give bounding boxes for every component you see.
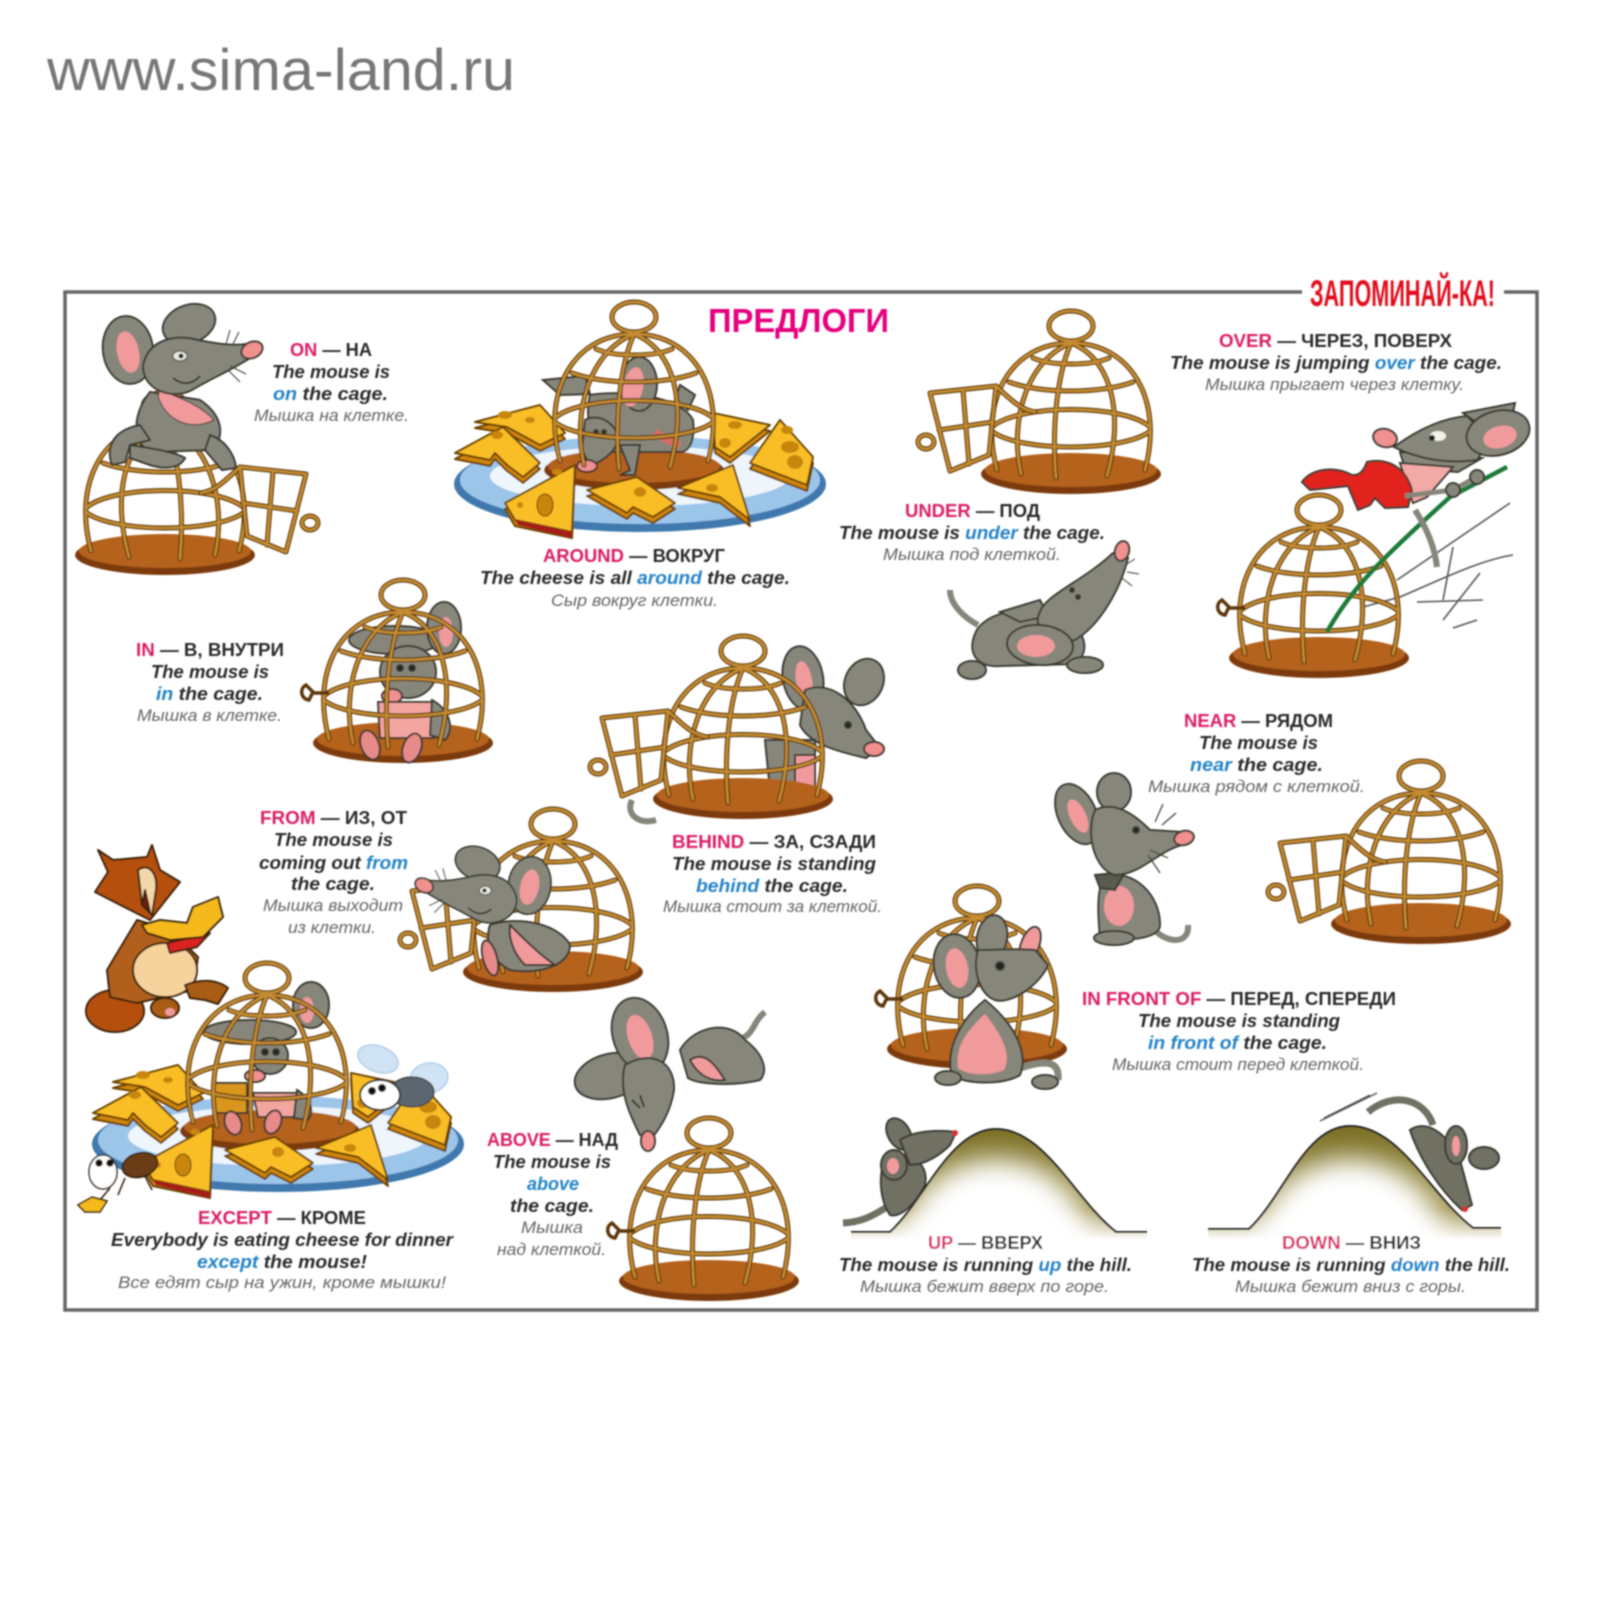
text: in front of: in front of the cage. xyxy=(1148,1033,1327,1053)
cage with door xyxy=(400,809,643,992)
text: above: над клеткой. xyxy=(497,1240,606,1259)
cage xyxy=(1218,495,1409,678)
hill xyxy=(1207,1124,1502,1264)
cage xyxy=(608,1118,799,1301)
text: under xyxy=(839,501,1105,564)
text: behind: BEHIND — ЗА, СЗАДИ xyxy=(672,832,876,852)
panel: around xyxy=(454,302,826,610)
front cheese xyxy=(143,1125,388,1198)
text: in: The mouse is xyxy=(151,662,269,682)
text: down: The mouse is running down the hill. xyxy=(1192,1255,1510,1275)
mouse in cage xyxy=(349,602,461,765)
cage with door xyxy=(590,636,833,819)
tail xyxy=(630,800,656,821)
cage xyxy=(555,302,713,469)
jumping mouse xyxy=(1302,403,1535,567)
mouse running down xyxy=(1368,1100,1499,1212)
text: over: Мышка прыгает через клетку. xyxy=(1205,375,1464,394)
panel: near xyxy=(1046,711,1511,945)
cage with door xyxy=(1268,761,1511,944)
text: up: UP — ВВЕРХ xyxy=(928,1233,1043,1253)
cage xyxy=(302,580,482,747)
text: under: Мышка под клеткой. xyxy=(883,545,1061,564)
text: over xyxy=(1170,331,1502,394)
panel: under xyxy=(839,311,1161,679)
site url: www.sima-land.ru xyxy=(46,38,515,103)
text: up xyxy=(839,1233,1132,1296)
text: above: The mouse is xyxy=(493,1152,611,1172)
mouse inside cage xyxy=(543,357,695,475)
text: in front of: The mouse is standing xyxy=(1138,1011,1340,1031)
cage xyxy=(876,886,1067,1069)
text: under: The mouse is under the cage. xyxy=(839,523,1105,543)
text: behind xyxy=(663,832,882,916)
text: under: UNDER — ПОД xyxy=(905,501,1040,521)
text: from xyxy=(259,808,408,937)
motion lines xyxy=(1363,503,1513,628)
text: around: AROUND — ВОКРУГ xyxy=(543,546,725,566)
motion lines xyxy=(1320,1093,1377,1121)
cage with door xyxy=(75,392,318,575)
text: from: Мышка выходит xyxy=(263,896,403,915)
text: near: Мышка рядом с клеткой. xyxy=(1148,777,1365,796)
mouse near xyxy=(1046,773,1195,945)
mouse in cage xyxy=(204,982,329,1137)
text: except: EXCEPT — КРОМЕ xyxy=(198,1208,366,1228)
mouse behind xyxy=(765,643,891,790)
text: on xyxy=(254,340,409,425)
text: except: Все едят сыр на ужин, кроме мышки! xyxy=(118,1273,446,1292)
text: on: Мышка на клетке. xyxy=(254,406,409,425)
text: from: FROM — ИЗ, ОТ xyxy=(260,808,407,828)
text: except: except the mouse! xyxy=(197,1252,367,1272)
pole xyxy=(1327,467,1507,632)
text: down: Мышка бежит вниз с горы. xyxy=(1235,1277,1466,1296)
text: near: near the cage. xyxy=(1190,755,1323,775)
text: behind: Мышка стоит за клеткой. xyxy=(663,897,882,916)
text: except xyxy=(111,1208,454,1292)
text: near xyxy=(1148,711,1365,796)
text: around: The cheese is all around the cage. xyxy=(480,568,790,588)
cage xyxy=(188,963,346,1130)
panel: in front of xyxy=(876,886,1396,1089)
panel: in xyxy=(136,580,493,765)
panel: over xyxy=(1170,331,1535,678)
text: up: The mouse is running up the hill. xyxy=(839,1255,1132,1275)
mouse in front xyxy=(929,913,1058,1089)
beetle and ant xyxy=(78,1149,160,1212)
text: on: The mouse is xyxy=(272,362,390,382)
text: above: Мышка xyxy=(521,1218,583,1237)
text: above xyxy=(487,1130,618,1259)
cage with door xyxy=(918,311,1161,494)
cage base xyxy=(544,449,724,490)
panel: from xyxy=(259,808,643,992)
text: in xyxy=(136,640,284,725)
frame xyxy=(65,292,1537,1310)
text: above: above xyxy=(527,1174,579,1194)
text: around xyxy=(480,546,790,610)
text: in: IN — В, ВНУТРИ xyxy=(136,640,284,660)
fly xyxy=(354,1040,450,1110)
hill xyxy=(850,1126,1148,1264)
text: up: Мышка бежит вверх по горе. xyxy=(860,1277,1109,1296)
panel: on xyxy=(75,297,409,575)
title: ПРЕДЛОГИ xyxy=(708,302,889,339)
text: on: ON — НА xyxy=(290,340,372,360)
front cheese xyxy=(505,465,750,538)
plate and back cheese xyxy=(454,405,826,532)
text: from: из клетки. xyxy=(288,918,376,937)
panel: behind xyxy=(590,636,891,916)
text: except: Everybody is eating cheese for dinner xyxy=(111,1230,454,1250)
cage base xyxy=(180,1110,360,1151)
text: from: coming out from xyxy=(259,853,408,873)
panel: except xyxy=(78,845,464,1292)
text: near: NEAR — РЯДОМ xyxy=(1184,711,1333,731)
text: from: The mouse is xyxy=(274,830,393,850)
text: over: OVER — ЧЕРЕЗ, ПОВЕРХ xyxy=(1219,331,1452,351)
text: down: DOWN — ВНИЗ xyxy=(1282,1233,1421,1253)
text: in front of xyxy=(1082,989,1396,1074)
text: behind: The mouse is standing xyxy=(672,854,876,874)
mouse on top xyxy=(99,297,265,470)
text: from: the cage. xyxy=(291,874,375,894)
mouse coming out xyxy=(413,840,570,977)
plate and back cheese xyxy=(92,1065,464,1192)
mouse running up xyxy=(843,1114,958,1223)
mouse above xyxy=(570,991,765,1151)
text: behind: behind the cage. xyxy=(696,876,848,896)
text: in front of: IN FRONT OF — ПЕРЕД, СПЕРЕДИ xyxy=(1082,989,1396,1009)
text: above: ABOVE — НАД xyxy=(487,1130,618,1150)
cat with cheese xyxy=(86,845,228,1032)
text: above: the cage. xyxy=(510,1196,594,1216)
text: near: The mouse is xyxy=(1199,733,1318,753)
text: in front of: Мышка стоит перед клеткой. xyxy=(1112,1055,1364,1074)
text: in: in the cage. xyxy=(156,684,263,704)
text: down xyxy=(1192,1233,1510,1296)
cage base xyxy=(313,722,493,763)
text: over: The mouse is jumping over the cage. xyxy=(1170,353,1502,373)
text: on: on the cage. xyxy=(273,384,388,404)
panel: down xyxy=(1192,1092,1510,1296)
text: in: Мышка в клетке. xyxy=(137,706,282,725)
panel: above xyxy=(487,991,799,1301)
text: around: Сыр вокруг клетки. xyxy=(551,591,718,610)
panel: up xyxy=(839,1116,1148,1296)
mouse under xyxy=(950,540,1139,679)
